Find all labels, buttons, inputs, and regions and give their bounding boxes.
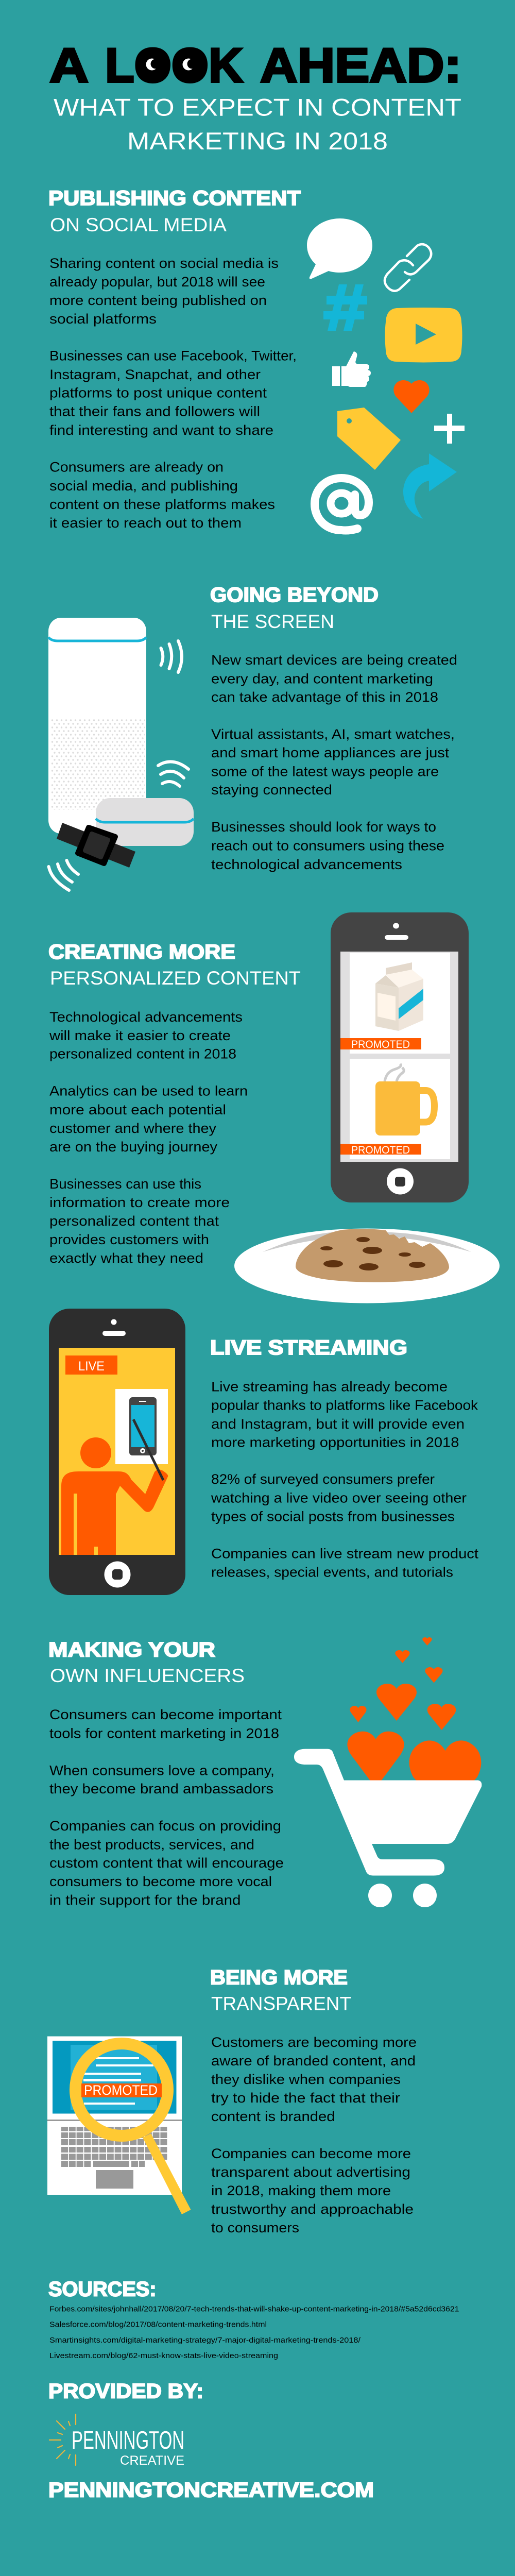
title: LOOK [105, 38, 243, 92]
text block: publishing content body: Consumers are already on [49, 460, 224, 475]
icon: magnifying glass over promoted [75, 2043, 191, 2214]
heading: being more [210, 1966, 351, 2014]
title [49, 38, 461, 92]
heading: going beyond: THE SCREEN [211, 611, 334, 632]
text block: being more body: they dislike when companies [211, 2072, 401, 2087]
heading: creating more: CREATING MORE [48, 941, 235, 963]
icon: speech bubble [307, 218, 372, 279]
text block: going beyond body: staying connected [211, 782, 332, 798]
icon: price tag [337, 408, 401, 470]
icon: smart speaker [48, 618, 146, 834]
icon: video play button [385, 308, 462, 363]
icon: chain link [385, 244, 431, 291]
text block: creating more body: customer and where they [49, 1121, 217, 1136]
icon: plus [434, 414, 465, 444]
text block: being more body: in 2018, making them more [211, 2183, 391, 2198]
title: AHEAD: [260, 38, 461, 92]
icon: smartphone live stream [49, 1309, 185, 1595]
text block: creating more body: will make it easier to create [49, 1028, 231, 1043]
text block: being more body: content is branded [211, 2109, 335, 2124]
icon: milk carton [375, 962, 423, 1031]
text block: publishing content body: more content being published on [49, 293, 267, 308]
text block: being more body: aware of branded content, and [211, 2053, 416, 2069]
text block: creating more body: Technological advancements [49, 1009, 243, 1025]
logo: pennington creative: PENNINGTON [72, 2427, 184, 2454]
label: promoted: PROMOTED [351, 1144, 410, 1156]
pointer stick [133, 1419, 163, 1480]
text block: live streaming body: types of social posts from businesses [211, 1509, 455, 1524]
label: live badge [65, 1355, 117, 1375]
subtitle [54, 94, 461, 155]
text block: going beyond body: some of the latest ways people are [211, 764, 439, 779]
icon: watch signal waves [48, 860, 78, 890]
text block: source links: Forbes.com/sites/johnhall/2017/08/20/7-tech-trends-that-will-shake-up-content-marketing-in-2018/#5a52d6cd3621 [49, 2305, 459, 2313]
text block: being more body: Customers are becoming more [211, 2035, 417, 2050]
text block: publishing content body: social platforms [49, 311, 157, 327]
text block: creating more body: information to create more [49, 1195, 230, 1210]
subtitle: MARKETING IN 2018 [127, 127, 388, 155]
text block: making your body: in their support for the brand [49, 1892, 241, 1908]
text block: going beyond body [211, 652, 457, 872]
text block: being more body: Companies can become more [211, 2146, 411, 2161]
heading: live streaming: LIVE STREAMING [210, 1336, 407, 1359]
presentation board [115, 1389, 168, 1464]
heading: publishing content: PUBLISHING CONTENT [48, 187, 301, 210]
text block: being more body: try to hide the fact that their [211, 2090, 400, 2106]
text block: going beyond body: every day, and content marketing [211, 671, 433, 686]
text block: publishing content body: Businesses can use Facebook, Twitter, [49, 348, 297, 364]
panel: creating more personalized content [48, 912, 500, 1303]
text block: publishing content body: content on these platforms makes [49, 497, 275, 512]
text block: making your body: Consumers can become important [49, 1707, 282, 1722]
text block: live streaming body: and Instagram, but it will provide even [211, 1416, 465, 1432]
text block: source links: Livestream.com/blog/62-must-know-stats-live-video-streaming [49, 2351, 278, 2360]
icon: shopping cart full of hearts [294, 1637, 482, 1907]
text block: publishing content body: Sharing content on social media is [49, 256, 279, 271]
text block: creating more body: more about each potential [49, 1102, 226, 1117]
text block: live streaming body: more marketing opportunities in 2018 [211, 1434, 459, 1450]
heading: making your: MAKING YOUR [48, 1638, 215, 1661]
text block: making your body: the best products, services, and [49, 1837, 254, 1853]
text block: publishing content body: social media, and publishing [49, 478, 238, 494]
text block: being more body [211, 2035, 417, 2235]
heading: being more: BEING MORE [210, 1966, 348, 1989]
heading: creating more: PERSONALIZED CONTENT [50, 968, 301, 989]
panel: publishing content on social media [48, 187, 465, 531]
icon: cookie on plate [234, 1228, 500, 1303]
icon: thumbs up [332, 351, 371, 387]
icon: hashtag [323, 284, 367, 331]
text block: going beyond body: Virtual assistants, AI, smart watches, [211, 726, 455, 742]
icon: laptop [47, 2036, 182, 2195]
text block: making your body [49, 1707, 284, 1908]
text block: making your body: consumers to become more vocal [49, 1874, 272, 1889]
panel: being more transparent [47, 1966, 417, 2235]
text block: source links [49, 2305, 459, 2360]
text block: going beyond body: can take advantage of this in 2018 [211, 689, 438, 705]
text block: source links: Salesforce.com/blog/2017/08/content-marketing-trends.html [49, 2320, 267, 2329]
text block: publishing content body: that their fans and followers will [49, 404, 260, 419]
logo: pennington creative [49, 2414, 184, 2468]
icon: coffee mug [375, 1064, 435, 1136]
text block: making your body: Companies can focus on providing [49, 1818, 281, 1834]
icon: smart watch [57, 823, 135, 868]
text block: making your body: they become brand ambassadors [49, 1781, 273, 1797]
text block: source links: Smartinsights.com/digital-marketing-strategy/7-major-digital-marketing-trends-2018/ [49, 2336, 361, 2345]
title: A [49, 38, 89, 92]
icon: magnifying glass over promoted: PROMOTED [84, 2082, 158, 2098]
text block: creating more body: Analytics can be used to learn [49, 1083, 248, 1098]
heading: publishing content: ON SOCIAL MEDIA [50, 214, 227, 235]
text block: going beyond body: New smart devices are being created [211, 652, 457, 668]
heading: creating more [48, 941, 301, 989]
subtitle: WHAT TO EXPECT IN CONTENT [54, 94, 461, 121]
text block: making your body: custom content that will encourage [49, 1855, 284, 1871]
text block: being more body: to consumers [211, 2220, 299, 2235]
text block: live streaming body: releases, special events, and tutorials [211, 1564, 453, 1580]
text block: live streaming body [211, 1379, 479, 1580]
text block: going beyond body: reach out to consumers using these [211, 838, 444, 853]
icon: smartphone with promoted content [331, 912, 469, 1202]
heading: making your [48, 1638, 245, 1686]
heading: making your: OWN INFLUENCERS [50, 1665, 245, 1686]
text block: creating more body [49, 1009, 248, 1266]
panel: making your own influencers [48, 1637, 482, 1908]
text block: creating more body: Businesses can use this [49, 1176, 201, 1192]
heading: publishing content [48, 187, 301, 235]
icon: speaker sound waves [161, 641, 182, 672]
sources heading: SOURCES: [48, 2278, 157, 2301]
text block: live streaming body: popular thanks to platforms like Facebook [211, 1397, 478, 1413]
text block: going beyond body: Businesses should look for ways to [211, 819, 436, 835]
provided by heading: PROVIDED BY: [48, 2380, 203, 2403]
heading: going beyond [210, 584, 379, 632]
text block: publishing content body: already popular, but 2018 will see [49, 274, 265, 290]
label: promoted: PROMOTED [351, 1039, 410, 1050]
presenter figure [61, 1437, 168, 1555]
icon: share arrow [403, 453, 457, 519]
text block: live streaming body: 82% of surveyed consumers prefer [211, 1471, 435, 1487]
text block: publishing content body [49, 256, 297, 531]
text block: being more body: trustworthy and approachable [211, 2201, 414, 2217]
hearts [347, 1637, 481, 1814]
text block: publishing content body: Instagram, Snapchat, and other [49, 367, 261, 382]
text block: going beyond body: technological advancements [211, 857, 402, 872]
text block: creating more body: are on the buying journey [49, 1139, 218, 1155]
cart [294, 1749, 482, 1907]
text block: going beyond body: and smart home appliances are just [211, 745, 450, 760]
website url: PENNINGTONCREATIVE.COM [48, 2479, 374, 2502]
logo: pennington creative: CREATIVE [120, 2453, 184, 2468]
icon: at sign [315, 478, 369, 531]
text block: creating more body: personalized content that [49, 1213, 219, 1229]
text block: publishing content body: platforms to post unique content [49, 385, 267, 401]
text block: making your body: When consumers love a company, [49, 1763, 274, 1778]
text block: live streaming body: Companies can live stream new product [211, 1546, 479, 1561]
label: live badge: LIVE [78, 1359, 105, 1374]
text block: creating more body: provides customers with [49, 1232, 209, 1247]
icon: wifi waves [158, 761, 188, 786]
text block: creating more body: personalized content in 2018 [49, 1046, 236, 1061]
text block: creating more body: exactly what they need [49, 1250, 203, 1266]
text block: making your body: tools for content marketing in 2018 [49, 1726, 279, 1741]
icon: heart [393, 380, 430, 413]
panel: live streaming [49, 1309, 479, 1595]
panel: going beyond the screen [48, 584, 457, 890]
heading: going beyond: GOING BEYOND [210, 584, 379, 606]
icon: home hub device [96, 798, 194, 846]
text block: live streaming body: Live streaming has already become [211, 1379, 448, 1394]
heading: being more: TRANSPARENT [211, 1993, 351, 2014]
text block: publishing content body: it easier to reach out to them [49, 515, 242, 531]
text block: publishing content body: find interesting and want to share [49, 422, 273, 438]
text block: live streaming body: watching a live video over seeing other [211, 1490, 467, 1505]
text block: being more body: transparent about advertising [211, 2164, 410, 2180]
